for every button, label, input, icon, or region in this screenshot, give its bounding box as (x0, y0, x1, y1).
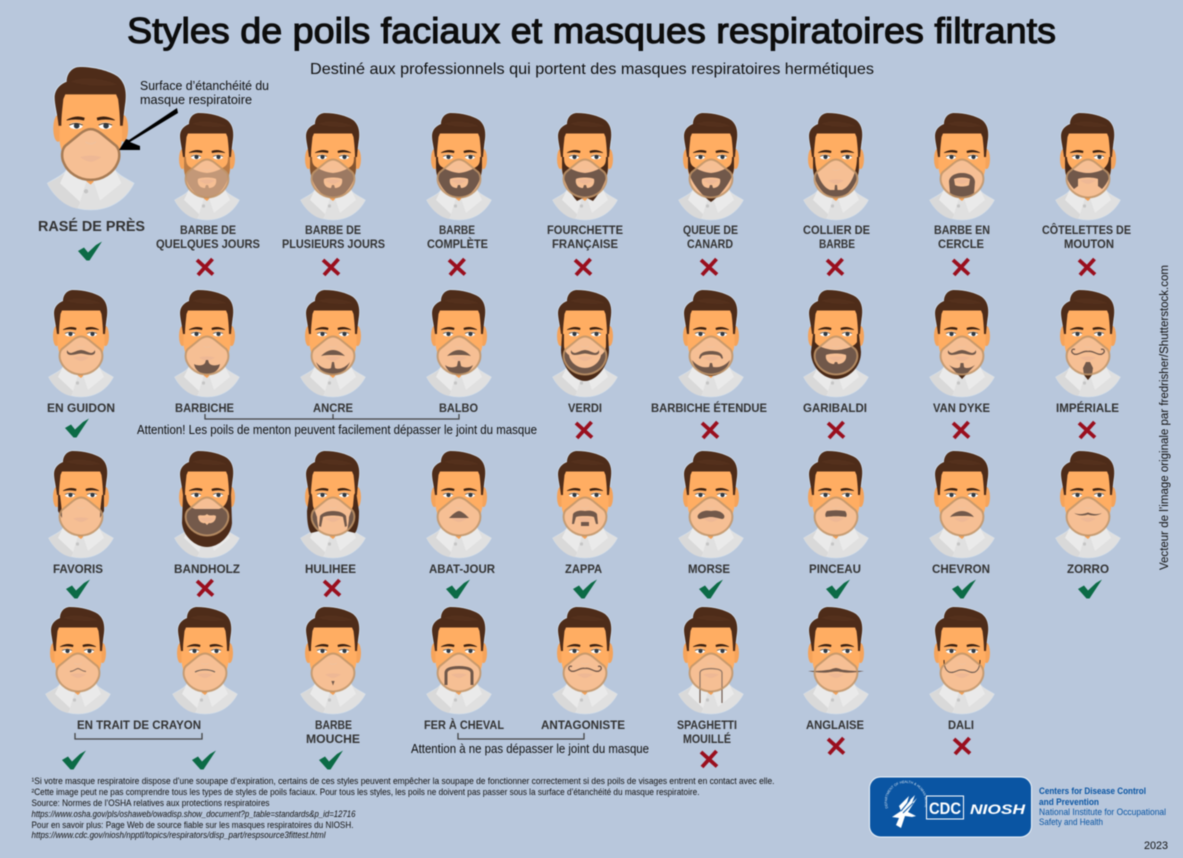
footnotes: ²Cette image peut ne pas comprendre tous les types de styles de poils faciaux. Pour tous les styles, les poils ne doivent pas passer sous la surface d’étanchéité du masque respiratoire. (32, 787, 700, 797)
panel: barbiche étendue (651, 290, 767, 438)
panel: zappa (552, 451, 618, 598)
panel: abat-jour: ABAT-JOUR (429, 562, 495, 576)
panel: barbe complète: BARBE (439, 223, 475, 237)
panel: collier de barbe: COLLIER DE (803, 223, 870, 237)
panel: barbe de quelques jours: QUELQUES JOURS (156, 237, 260, 251)
year: 2023 (1144, 840, 1168, 852)
panel: barbiche étendue: BARBICHE ÉTENDUE (651, 400, 767, 415)
panel: spaghetti mouillé: SPAGHETTI (677, 718, 737, 732)
agency name: and Prevention (1039, 797, 1099, 807)
panel: rasé de près (38, 67, 145, 260)
arrow (119, 108, 178, 150)
panel: bandholz: BANDHOLZ (174, 562, 240, 576)
footnotes: https://www.osha.gov/pls/oshaweb/owadisp.show_document?p_table=standards&p_id=12716 (32, 809, 356, 819)
panel: barbe de plusieurs jours (282, 113, 385, 275)
icon: CDC box: CDC (929, 800, 961, 818)
footnotes: Source: Normes de l’OSHA relatives aux protections respiratoires (32, 798, 270, 808)
footnotes (32, 776, 774, 840)
panel: dali: DALI (948, 718, 974, 732)
panel: barbe en cercle: BARBE EN (934, 223, 990, 237)
bracket: fer à cheval et antagoniste (458, 733, 584, 739)
panel: garibaldi: GARIBALDI (803, 401, 867, 415)
credit: vecteur: Vecteur de l’image originale par fredrisher/Shutterstock.com (1159, 265, 1171, 570)
footnotes: https://www.cdc.gov/niosh/npptl/topics/respirators/disp_part/respsource3fittest.html (32, 830, 326, 840)
panel: barbe en cercle (930, 113, 994, 275)
panel: balbo: BALBO (439, 401, 478, 415)
callout: surface d'étanchéité: Surface d’étanchéité du (140, 79, 269, 93)
panel: côtelettes de mouton (1042, 113, 1131, 275)
title: Styles de poils faciaux et masques respiratoires filtrants (127, 10, 1056, 51)
panel: fer à cheval (424, 607, 504, 732)
head: en trait de crayon 2 (172, 607, 238, 714)
agency name: Safety and Health (1039, 817, 1103, 827)
panel: en guidon: EN GUIDON (47, 401, 115, 415)
panel: impériale: IMPÉRIALE (1056, 400, 1119, 415)
panel: barbe complète (426, 113, 492, 275)
panel: chevron: CHEVRON (932, 562, 990, 576)
bracket: menton (205, 414, 459, 419)
bracket (75, 733, 202, 739)
panel: spaghetti mouillé: MOUILLÉ (683, 731, 731, 746)
panel: fer à cheval: FER À CHEVAL (424, 717, 504, 732)
panel: queue de canard (678, 113, 744, 275)
NIOSH wordmark: NIOSH (970, 802, 1025, 817)
check mark (78, 242, 102, 260)
panel: barbe de plusieurs jours: BARBE DE (305, 223, 361, 237)
panel: zorro (1056, 451, 1120, 598)
panel: fourchette française: FRANÇAISE (552, 237, 618, 251)
panel: côtelettes de mouton: CÔTELETTES DE (1042, 222, 1131, 237)
panel: ancre (300, 290, 366, 415)
icon: HHS seal: DEPARTMENT OF HEALTH & HUMAN SERVICES (884, 780, 927, 810)
panel: bandholz (174, 451, 240, 596)
panel: van dyke: VAN DYKE (933, 401, 990, 415)
agency name: National Institute for Occupational (1039, 807, 1166, 817)
panel: abat-jour (426, 451, 495, 598)
agency name: Centers for Disease Control (1039, 786, 1146, 796)
panel: antagoniste (541, 607, 625, 732)
panel: barbiche (174, 290, 240, 415)
panel: collier de barbe: BARBE (819, 237, 855, 251)
check mark 2 (192, 750, 216, 770)
footnotes: ¹Si votre masque respiratoire dispose d’une soupape d’expiration, certains de ces styles peuvent empêcher la soupape de fonctionner correctement si des poils de visages entrent en contact avec elle. (32, 776, 774, 786)
panel: barbe mouche (300, 607, 366, 770)
panel: pinceau: PINCEAU (809, 562, 861, 576)
panel: favoris (48, 451, 114, 598)
panel: pinceau (804, 451, 868, 598)
panel: barbe de quelques jours (156, 113, 260, 275)
panel: chevron (930, 451, 994, 598)
panel: zorro: ZORRO (1067, 562, 1109, 576)
panel: côtelettes de mouton: MOUTON (1064, 237, 1114, 251)
label: EN TRAIT DE CRAYON (77, 718, 201, 732)
subtitle: Destiné aux professionnels qui portent des masques respiratoires hermétiques (310, 61, 874, 78)
panel: barbe de quelques jours: BARBE DE (180, 223, 236, 237)
panel: antagoniste: ANTAGONISTE (541, 718, 625, 732)
panel: spaghetti mouillé (677, 607, 744, 767)
footnotes: Pour en savoir plus: Page Web de source fiable sur les masques respiratoires du NIOSH. (32, 820, 354, 830)
panel: barbiche: BARBICHE (175, 401, 234, 415)
panel: hulihee (300, 451, 366, 596)
callout: surface d'étanchéité: masque respiratoire (140, 93, 252, 107)
panel: barbe de plusieurs jours: PLUSIEURS JOURS (282, 237, 385, 251)
panel: van dyke (930, 290, 994, 438)
panel: morse (678, 451, 744, 598)
panel: morse: MORSE (688, 562, 730, 576)
note: poils de menton: Attention! Les poils de menton peuvent facilement dépasser le joint du masque (137, 422, 537, 437)
panel: queue de canard: QUEUE DE (683, 223, 738, 237)
panel: hulihee: HULIHEE (305, 562, 356, 576)
panel: impériale (1056, 290, 1120, 438)
label: RASÉ DE PRÈS (38, 218, 145, 235)
panel: favoris: FAVORIS (53, 562, 103, 576)
panel: collier de barbe (803, 113, 870, 275)
panel: verdi: VERDI (568, 401, 602, 415)
panel: ancre: ANCRE (313, 401, 353, 415)
panel: en guidon (47, 290, 115, 438)
panel: anglaise: ANGLAISE (806, 718, 864, 732)
panel: queue de canard: CANARD (687, 237, 733, 251)
panel: fourchette française: FOURCHETTE (547, 223, 623, 237)
panel: barbe mouche: BARBE (315, 718, 352, 732)
panel: barbe en cercle: CERCLE (938, 237, 984, 251)
panel: dali (930, 607, 994, 754)
head: en trait de crayon 1 (46, 607, 110, 714)
panel: fourchette française (547, 113, 623, 275)
head: rasé de près (47, 67, 134, 210)
callout: surface d'étanchéité (140, 79, 269, 107)
agency name (1039, 786, 1166, 827)
panel: verdi (552, 290, 618, 438)
panel: barbe complète: COMPLÈTE (427, 236, 488, 251)
panel: garibaldi (803, 290, 868, 438)
panel: barbe mouche: MOUCHE (306, 732, 360, 746)
panel: anglaise (804, 607, 868, 754)
check mark 1 (62, 750, 86, 770)
panel: balbo (426, 290, 492, 415)
panel: en trait de crayon (46, 607, 238, 770)
note: joint du masque: Attention à ne pas dépasser le joint du masque (411, 741, 649, 756)
icon: HHS seal (884, 780, 927, 828)
panel: zappa: ZAPPA (565, 562, 602, 576)
